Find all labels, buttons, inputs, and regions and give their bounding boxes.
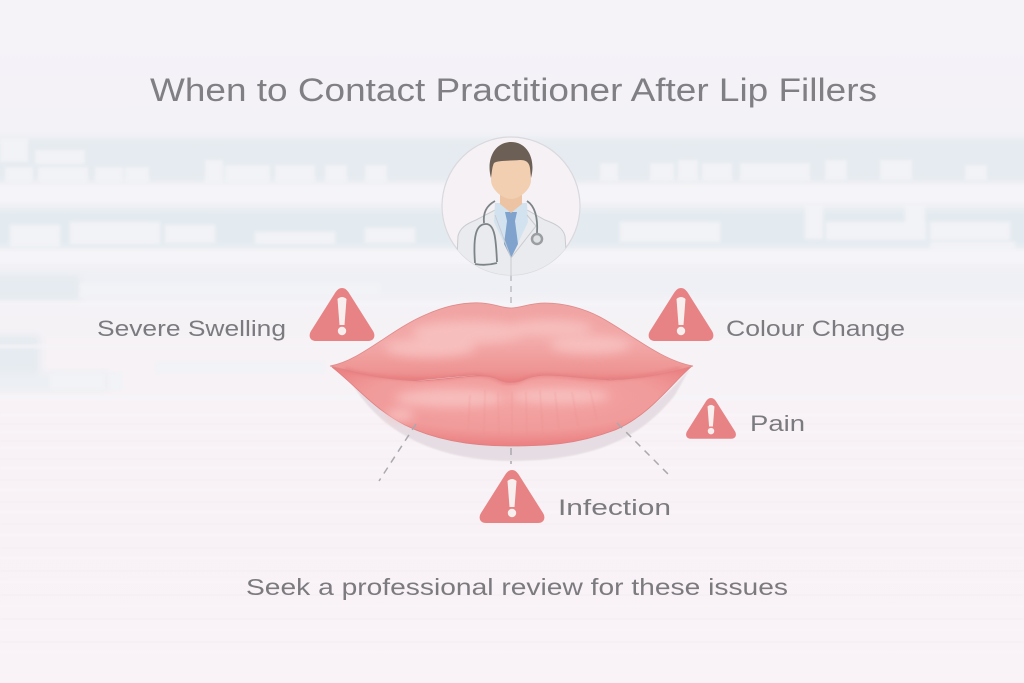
doctor face: [491, 158, 531, 199]
callout: Pain: [686, 398, 805, 439]
icon: warning triangle: [649, 288, 713, 341]
callout: Infection: Infection: [558, 495, 671, 520]
title: When to Contact Practitioner After Lip Fillers: [150, 72, 877, 108]
lower lip: [332, 366, 692, 446]
lip shadow: [350, 368, 690, 461]
icon: doctor portrait: [442, 137, 580, 280]
upper lip: [330, 303, 693, 382]
icon: warning triangle: [310, 288, 374, 341]
lip texture: [468, 390, 597, 438]
doctor coat: [456, 210, 568, 280]
connectors: lip callouts: [379, 423, 671, 481]
callout: Pain: Pain: [750, 411, 805, 436]
lips: [330, 303, 693, 461]
callout: Colour Change: Colour Change: [726, 316, 905, 341]
connector: doctor to lips: [510, 275, 512, 310]
footer message: Seek a professional review for these issues: [246, 574, 788, 600]
doctor hair: [490, 142, 532, 178]
callout: Infection: [480, 470, 671, 523]
lip parting line: [345, 368, 680, 383]
doctor neck: [500, 192, 522, 213]
lip highlights: [385, 320, 630, 421]
callout: Severe Swelling: Severe Swelling: [97, 316, 286, 341]
callout: Colour Change: [649, 288, 905, 341]
doctor shirt and tie: [494, 203, 528, 243]
stethoscope: [474, 201, 542, 265]
icon: warning triangle: [686, 398, 736, 439]
doctor lapels: [495, 215, 536, 276]
icon: warning triangle: [480, 470, 544, 523]
callout: Severe Swelling: [97, 288, 374, 341]
